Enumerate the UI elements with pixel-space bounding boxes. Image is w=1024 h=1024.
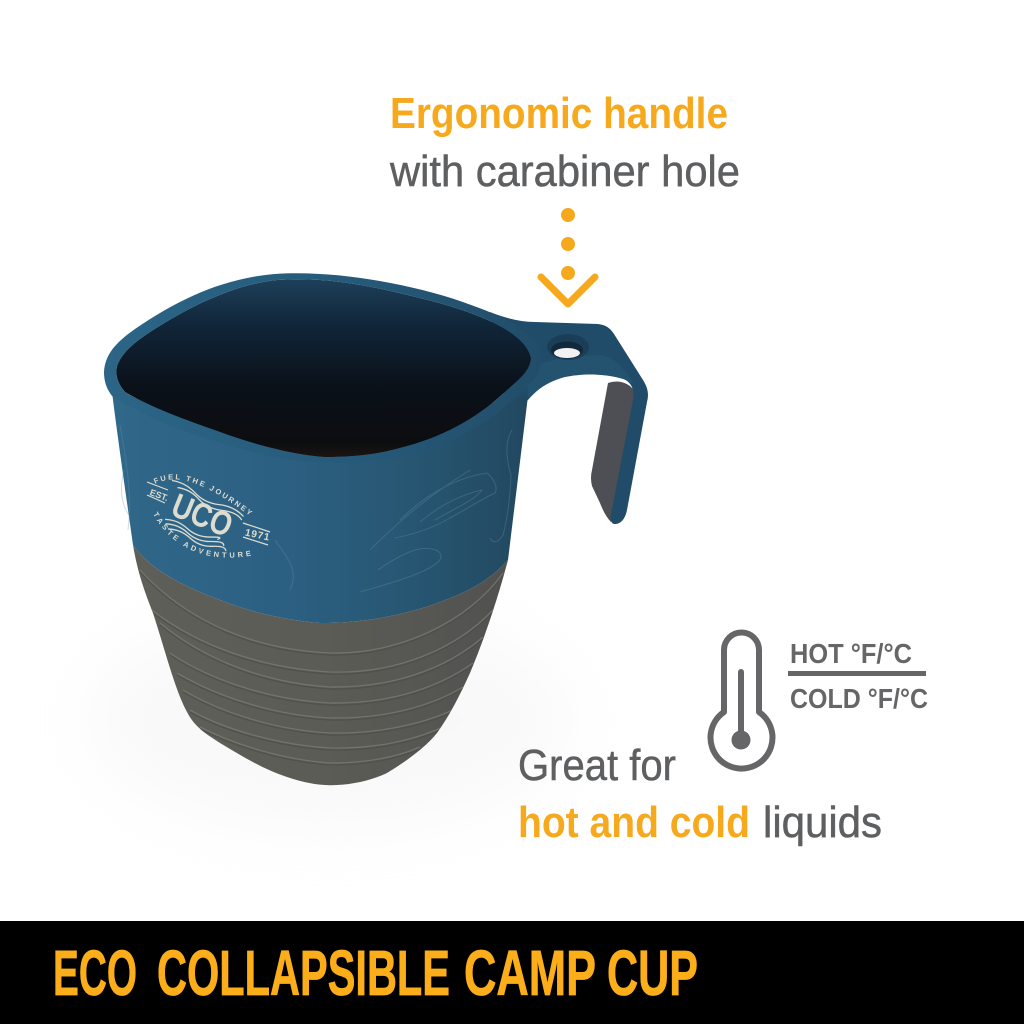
- cold rating: COLD °F/°C: [790, 683, 928, 714]
- cup blue upper body: [112, 392, 528, 623]
- logo bottom arc text: TASTE ADVENTURE: [154, 511, 251, 558]
- logo year: 1971: [244, 528, 271, 544]
- title banner: [0, 921, 1024, 1024]
- carabiner hole: [547, 334, 589, 360]
- cup handle grip: [490, 312, 648, 524]
- logo est: EST.: [148, 487, 170, 503]
- cup logo: UCO: [146, 474, 271, 558]
- callout: ergonomic handle: [389, 89, 740, 196]
- icon: thermometer: [710, 632, 773, 769]
- cup rim: [104, 273, 541, 463]
- cup interior: [116, 279, 531, 457]
- logo side rules: [147, 482, 270, 545]
- callout line one: Great for: [518, 741, 676, 790]
- hot rating: HOT °F/°C: [790, 638, 912, 669]
- logo wordmark: UCO: [166, 487, 238, 545]
- callout heading: Ergonomic handle: [390, 89, 728, 138]
- arrow: dotted pointer to handle: [541, 208, 595, 304]
- callout: hot and cold liquids: [518, 741, 882, 847]
- logo top arc text: FUEL THE JOURNEY: [154, 474, 252, 514]
- temperature rating label: [788, 638, 928, 714]
- base ridges: [140, 570, 503, 765]
- logo bottom wave lines: [161, 518, 230, 553]
- soft cup shadow: [90, 610, 570, 830]
- banner title: CUP: [607, 937, 698, 1009]
- callout emphasis: hot and cold: [518, 798, 750, 847]
- logo top wave lines: [169, 479, 245, 522]
- cup illustration: [104, 273, 648, 786]
- cup topographic line pattern: [120, 425, 512, 592]
- cup gray collapsible base: [133, 545, 508, 785]
- banner title: CAMP: [464, 937, 596, 1009]
- callout line two end: liquids: [763, 798, 882, 847]
- rating divider: [788, 671, 926, 676]
- banner title: COLLAPSIBLE: [157, 937, 450, 1009]
- banner title: ECO: [53, 937, 137, 1009]
- callout subtext: with carabiner hole: [389, 147, 740, 196]
